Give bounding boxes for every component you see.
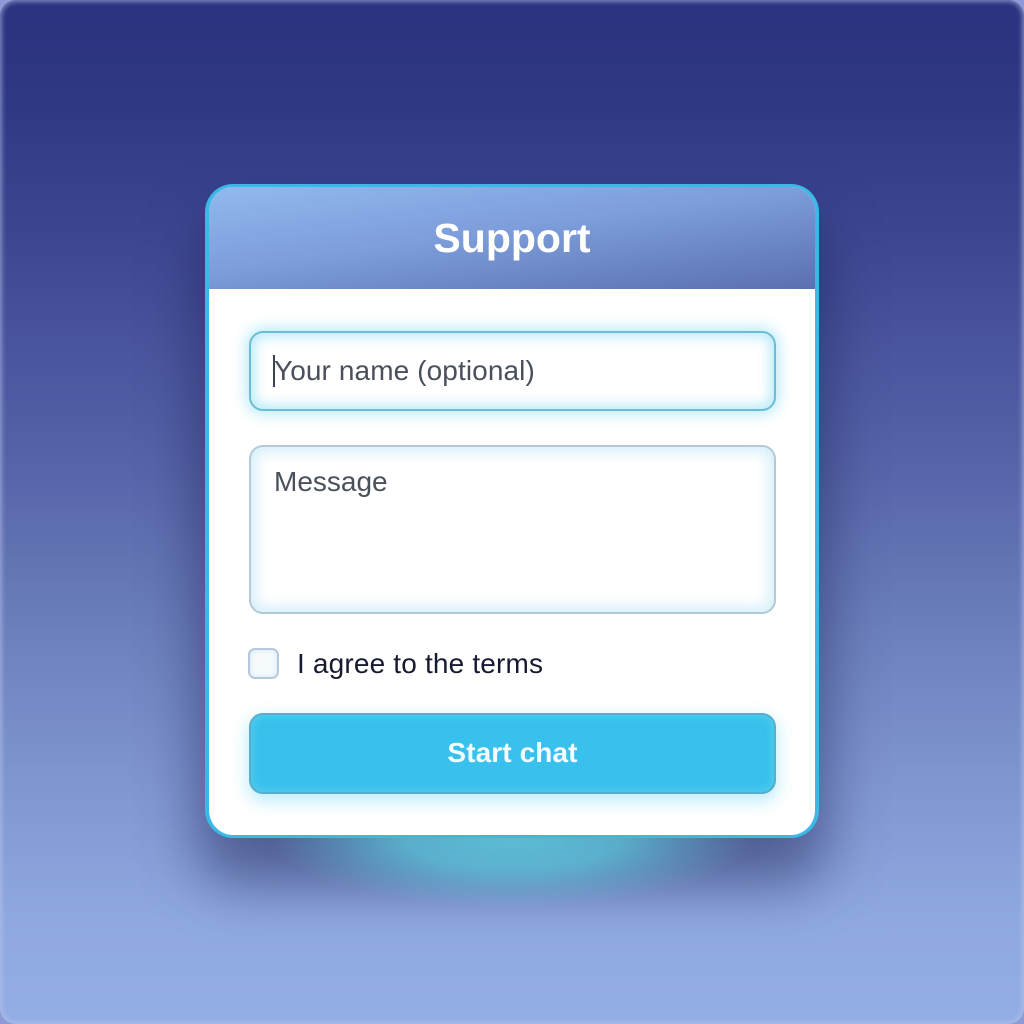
cyan glow under card [272,768,752,908]
input: your name [249,331,776,411]
button: start chat [249,713,776,794]
button: start chat: Start chat [447,737,578,768]
checkbox label: I agree to the terms [297,648,543,679]
panel: support form card [205,184,819,838]
text cursor [273,355,275,387]
placeholder: message: Message [274,466,388,497]
title: Support [433,215,591,261]
placeholder: name: Your name (optional) [274,355,535,386]
card drop shadow [196,215,828,885]
header band [209,187,815,289]
checkbox [248,648,279,679]
textarea: message [249,445,776,614]
